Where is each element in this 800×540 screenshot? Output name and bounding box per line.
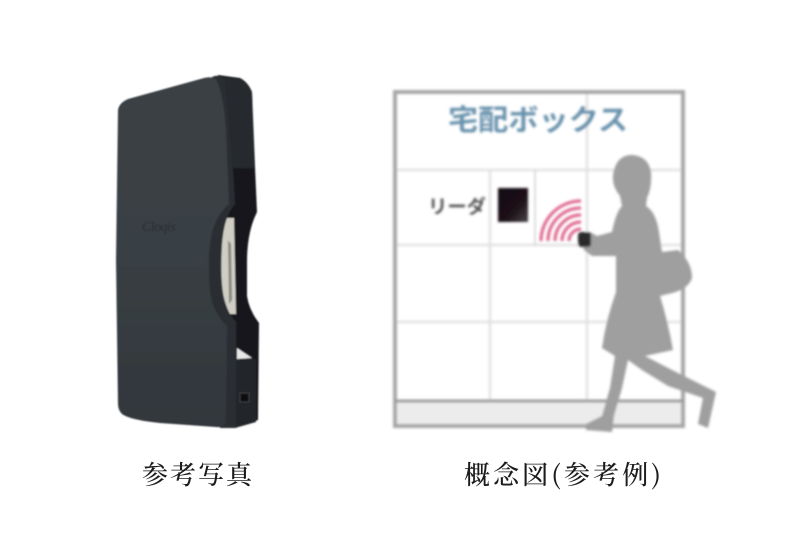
device small slot xyxy=(240,393,249,402)
label: reader: リーダ xyxy=(428,195,486,218)
product photo: reader device xyxy=(116,75,259,428)
device inner white mechanism xyxy=(218,218,236,314)
device dark inner detail xyxy=(228,240,232,304)
caption: reference photo: 参考写真 xyxy=(142,455,254,492)
person body and legs xyxy=(580,155,716,432)
device front bevel xyxy=(200,76,236,428)
device front face xyxy=(116,77,229,427)
delivery box frame xyxy=(395,92,683,426)
icon: wireless signal xyxy=(541,201,581,241)
concept diagram xyxy=(393,90,716,432)
device logo: Cloqis xyxy=(142,220,177,235)
device lower notch highlight xyxy=(237,348,252,359)
phone in hand xyxy=(578,232,591,247)
person silhouette xyxy=(578,155,716,432)
delivery box floor band xyxy=(396,402,684,425)
device lower rear block xyxy=(235,359,256,428)
device upper rear panel xyxy=(222,77,254,168)
device rear housing xyxy=(218,75,259,428)
icon: reader panel xyxy=(498,188,528,222)
title: delivery box: 宅配ボックス xyxy=(448,104,628,137)
locker grid lines xyxy=(393,90,685,400)
caption: concept diagram: 概念図(参考例) xyxy=(464,455,661,492)
